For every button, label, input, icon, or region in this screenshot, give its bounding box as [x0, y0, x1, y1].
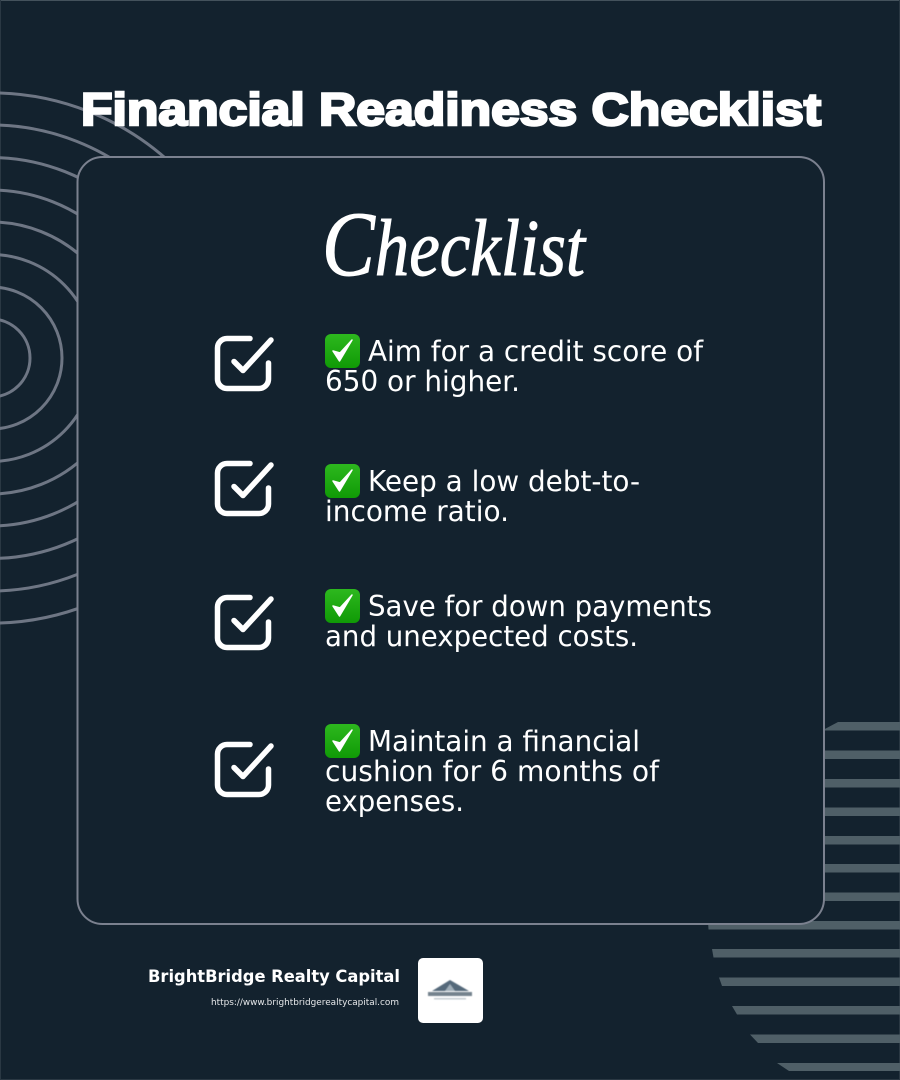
text: item 2 [325, 465, 640, 528]
icon: green check emoji 1 [325, 334, 360, 368]
title: Financial Readiness Checklist [81, 84, 821, 135]
checklist item 4 [218, 724, 660, 818]
panel: checklist [78, 157, 824, 924]
panel heading: Checklist: Checklist [322, 193, 587, 295]
text: item 3: Save for down payments [368, 590, 712, 623]
text: item 2: income ratio. [325, 495, 509, 528]
checklist item 1 [218, 334, 704, 398]
text: item 4: Maintain a financial [368, 725, 640, 758]
text: item 2: Keep a low debt-to- [368, 465, 640, 498]
checklist item 3 [218, 589, 712, 653]
decorative concentric arcs [0, 93, 256, 623]
logo [418, 958, 483, 1023]
icon: green check emoji 4 [325, 724, 360, 758]
text: item 4: expenses. [325, 785, 464, 818]
icon: checkbox 2 [218, 464, 271, 514]
icon: checkbox 4 [218, 744, 271, 794]
icon: checkbox 1 [218, 338, 271, 388]
text: item 4: cushion for 6 months of [325, 755, 660, 788]
icon: green check emoji 3 [325, 589, 360, 623]
icon: green check emoji 2 [325, 464, 360, 498]
text: item 1: 650 or higher. [325, 365, 520, 398]
footer company name: BrightBridge Realty Capital [148, 967, 400, 986]
decorative stripes [708, 722, 900, 1071]
text: item 3 [325, 590, 712, 653]
footer url: https://www.brightbridgerealtycapital.com [211, 998, 399, 1008]
checklist item 2 [218, 464, 640, 528]
icon: checkbox 3 [218, 598, 271, 648]
text: item 1: Aim for a credit score of [368, 335, 704, 368]
text: item 3: and unexpected costs. [325, 620, 638, 653]
text: item 1 [325, 335, 704, 398]
text: item 4 [325, 725, 660, 818]
